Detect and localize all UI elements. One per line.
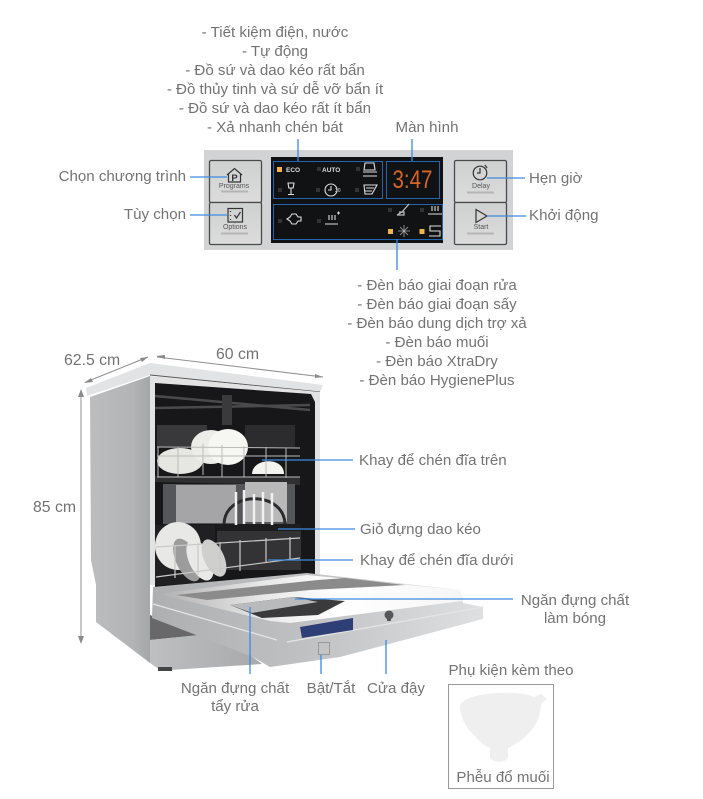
- leader lines: control panel: [190, 139, 526, 270]
- indicator list: - Đèn báo XtraDry: [376, 353, 498, 370]
- dishwasher: [86, 363, 483, 671]
- label: detergent: Ngăn đựng chất: [181, 680, 290, 697]
- cabinet top: [86, 363, 323, 396]
- button: programs: P: [231, 173, 238, 184]
- label: accessories: Phụ kiện kèm theo: [448, 662, 574, 679]
- label: rinse aid: Ngăn đựng chất: [521, 592, 630, 609]
- dimension: width: [156, 346, 323, 378]
- label: screen: Màn hình: [396, 119, 458, 136]
- upper rack and dishes: [155, 429, 300, 485]
- accessory box: salt funnel: [448, 684, 554, 788]
- label: program select: Chọn chương trình: [59, 168, 186, 185]
- label: detergent: tẩy rửa: [211, 698, 260, 715]
- interior: [150, 376, 320, 585]
- door body silhouette: [152, 573, 483, 667]
- button: start: [454, 202, 506, 244]
- cabinet side: [90, 376, 150, 663]
- label: detergent: [181, 680, 290, 715]
- foot: [158, 667, 172, 671]
- button: options: Options: [223, 224, 248, 231]
- button: start: Start: [474, 224, 488, 231]
- feature list: wash programs: - Tiết kiệm điện, nước: [202, 24, 349, 41]
- brand label: [300, 618, 353, 638]
- dimension: width: 60 cm: [216, 346, 259, 363]
- button: delay: Delay: [472, 183, 490, 190]
- label: start: Khởi động: [529, 207, 598, 224]
- label: door: Cửa đậy: [367, 680, 425, 697]
- button: programs: Programs: [219, 183, 250, 190]
- black control display: 30: [335, 188, 341, 194]
- dimension: depth: 62.5 cm: [64, 352, 120, 369]
- door knob: [384, 610, 394, 620]
- label: rinse aid: làm bóng: [544, 610, 606, 627]
- dimension: depth: [64, 352, 148, 383]
- indicator list: - Đèn báo dung dịch trợ xả: [347, 315, 527, 332]
- open door inner surface: [158, 575, 462, 623]
- feature list: wash programs: - Đồ thủy tinh và sứ dễ vỡ bẩn ít: [167, 81, 384, 98]
- leader lines: dishwasher: [250, 460, 513, 674]
- icon: funnel: [460, 693, 547, 762]
- label: power: Bật/Tắt: [307, 680, 356, 697]
- label: delay: Hẹn giờ: [529, 170, 583, 187]
- control panel: [204, 150, 513, 250]
- display digits: 3:47: [392, 166, 432, 194]
- indicator list: [347, 277, 527, 389]
- power button: [318, 642, 330, 654]
- indicator list: - Đèn báo giai đoạn sấy: [357, 296, 517, 313]
- button: options: [210, 202, 262, 244]
- feature list: wash programs: - Xả nhanh chén bát: [207, 119, 344, 136]
- black control display: AUTO: [322, 167, 340, 174]
- feature list: wash programs: - Tự động: [242, 43, 308, 60]
- label: rinse aid: [521, 592, 630, 627]
- dimension: height: [33, 389, 84, 644]
- lower rack and dishes: [155, 482, 301, 585]
- label: lower rack: Khay để chén đĩa dưới: [360, 552, 513, 569]
- label: options: Tùy chọn: [124, 206, 186, 223]
- label: cutlery basket: Giỏ đựng dao kéo: [360, 521, 481, 538]
- indicator list: - Đèn báo muối: [385, 334, 489, 351]
- label: upper rack: Khay để chén đĩa trên: [359, 452, 507, 469]
- indicator list: - Đèn báo giai đoạn rửa: [357, 277, 517, 294]
- feature list: wash programs: - Đồ sứ và dao kéo rất ít bẩn: [179, 100, 371, 117]
- door rail highlight: [153, 604, 483, 642]
- plinth: [150, 615, 200, 640]
- black control display: [271, 157, 443, 243]
- door dispenser recess: [230, 597, 345, 618]
- accessory box: salt funnel: Phễu đổ muối: [456, 769, 550, 786]
- button: delay: [454, 160, 506, 202]
- button: programs: [210, 160, 262, 202]
- black control display: ECO: [286, 167, 300, 174]
- feature list: wash programs: [167, 24, 384, 136]
- feature list: wash programs: - Đồ sứ và dao kéo rất bẩn: [185, 62, 365, 79]
- indicator list: - Đèn báo HygienePlus: [359, 372, 515, 389]
- dimension: height: 85 cm: [33, 499, 76, 516]
